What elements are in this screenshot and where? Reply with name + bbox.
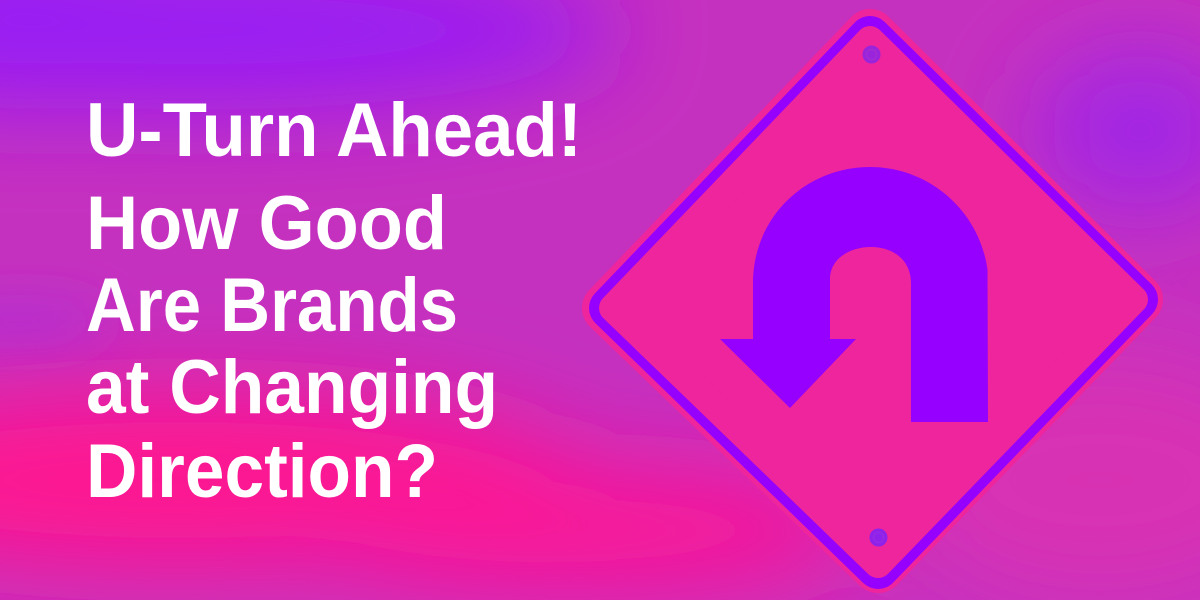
icon: bottom bolt [870, 528, 888, 546]
icon: u-turn arrow [720, 167, 988, 422]
icon: top bolt [862, 46, 880, 64]
headline line 5: Direction? [86, 429, 438, 514]
sign face [613, 40, 1134, 564]
sign outer pink border [608, 35, 1137, 567]
title [86, 88, 582, 514]
road sign [608, 35, 1137, 568]
headline line 2: How Good [86, 181, 447, 266]
headline line 4: at Changing [86, 345, 498, 430]
headline line 3: Are Brands [86, 263, 458, 348]
headline line 1: U-Turn Ahead! [86, 88, 582, 173]
sign purple border [610, 37, 1137, 568]
